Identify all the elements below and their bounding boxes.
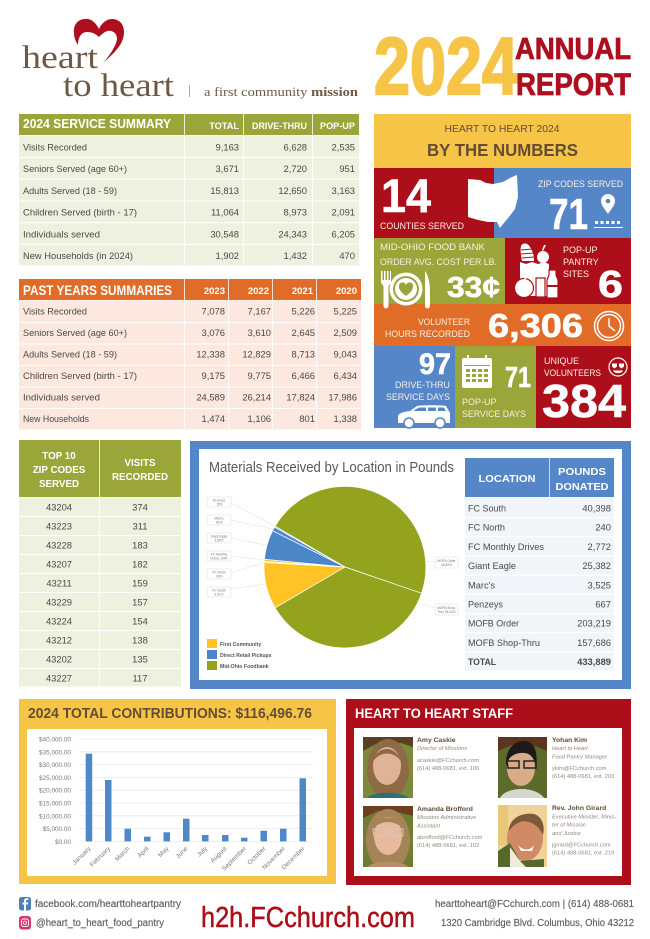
table: 2024 service summary: 1,432 [284,250,307,261]
column heading: zip codes: TOP 10 [42,451,76,462]
icon: facebook [19,897,31,910]
stat: pop-up pantry sites [505,238,631,306]
table: 2024 service summary: 11,064 [211,207,239,218]
table: 2024 service summary: 951 [339,163,355,174]
table: pounds donated: Giant Eagle [468,560,516,571]
table: 2024 service summary: 2,535 [332,142,355,152]
staff: Amy Caskie [417,737,479,772]
table: past years summaries: 5,225 [334,306,357,316]
table: top 10 zip codes: 43202 [46,654,72,664]
bar chart: June [175,845,190,860]
staff: Amy Caskie: acaskie@FCchurch.com [417,758,479,764]
staff: Amy Caskie: (614) 488-0681, ext. 106 [417,766,479,772]
staff: Yohan Kim [552,737,614,780]
staff heading: HEART TO HEART STAFF [355,705,513,721]
table: pounds donated: 433,889 [577,656,611,667]
bar chart: May [157,845,171,859]
table: past years summaries: 7,167 [248,306,271,316]
table: 2024 service summary: 30,548 [210,228,239,239]
staff: Yohan Kim: Food Pantry Manager [552,754,608,760]
stat: zip codes served: ZIP CODES SERVED [538,179,623,189]
table: 2024 service summary: 8,973 [284,207,307,218]
table: top 10 zip codes: 43224 [46,616,72,626]
pie data labels: .06% [215,574,223,578]
staff: Amy Caskie: Amy Caskie [417,737,456,744]
table: top 10 zip codes: 157 [132,596,148,608]
staff: Rev. John Girard: and Justice [552,831,581,837]
table: past years summaries: 26,214 [242,392,271,402]
icon: clock [594,312,624,340]
bar chart: February [89,845,112,869]
table: 2024 service summary: 6,628 [284,142,307,152]
column heading: visits: VISITS [124,458,156,469]
bar chart: $5,000.00 [43,826,71,833]
stat: zip codes served [494,168,631,239]
pie data labels: MOFB Order [437,559,456,563]
table: pounds donated: 2,772 [588,541,611,552]
table: past years summaries: 5,226 [292,306,315,316]
table: past years summaries: 17,986 [328,392,357,402]
table: past years summaries: 7,078 [202,306,225,316]
table: past years summaries: 12,338 [196,348,225,360]
icon: calendar [462,355,492,388]
pie legend [207,639,272,670]
stat: counties served [374,168,494,238]
table: past years summaries: Seniors Served (age 60+) [23,327,127,338]
stat: unique volunteers [536,346,631,428]
table: pounds donated: LOCATION [478,473,536,485]
column heading: visits: RECORDED [112,472,168,483]
table: pounds donated: 40,398 [582,502,611,514]
banner: by the numbers: HEART TO HEART 2024 [444,124,560,135]
photo: Amanda Brofford [363,806,413,867]
contact address: 1320 Cambridge Blvd. Columbus, Ohio 43212 [441,918,634,929]
pie data labels: Thru 36.34% [437,610,456,614]
table: past years summaries: 1,474 [202,413,225,424]
table: top 10 zip codes: 43204 [46,502,72,512]
panel: by the numbers [374,114,631,428]
table: top 10 zip codes: 43228 [46,540,72,550]
table: 2024 service summary: 1,902 [216,250,239,261]
panel: staff [346,699,631,885]
table: pounds donated [465,458,614,670]
table: past years summaries: 3,076 [202,327,225,338]
column heading: zip codes: ZIP CODES [33,465,86,476]
table: top 10 zip codes [19,440,181,687]
table: pounds donated: 3,525 [588,579,611,590]
table: past years summaries [19,279,361,430]
stat: drive-thru days [374,346,455,428]
table: 2024 service summary: POP-UP [320,121,355,131]
staff: Amy Caskie: Director of Missions [417,746,467,752]
photo: Yohan Kim [498,737,547,798]
logo word: heart: heart [22,40,98,76]
staff: Amanda Brofford: abrofford@FCchurch.com [417,835,483,841]
table heading: 2024 SERVICE SUMMARY [23,116,171,131]
table: pounds donated: FC South [468,502,506,514]
chart title: Materials Received by Location in Pounds [209,460,454,476]
stat: pop-up service days: SERVICE DAYS [462,409,526,419]
banner: by the numbers: BY THE NUMBERS [427,140,578,160]
stat: pop-up pantry sites: 6 [598,264,623,306]
bar chart: $40,000.00 [39,736,71,744]
pie chart [264,486,426,648]
bar chart: November [261,845,288,871]
table: past years summaries: Adults Served (18 - 59) [23,348,117,360]
bar chart: July [196,845,209,858]
pie data labels: Marc's [214,516,224,520]
icon: car [398,405,450,428]
stat: counties served: COUNTIES SERVED [380,221,464,231]
table: top 10 zip codes: 183 [132,540,148,550]
table: top 10 zip codes: 374 [132,502,148,512]
table: past years summaries: Individuals served [23,392,100,402]
table: top 10 zip codes: 138 [132,634,148,646]
stat: unique volunteers: UNIQUE [544,356,579,366]
table: top 10 zip codes: 154 [132,616,148,626]
staff: Yohan Kim: (614) 488-0681, ext. 203 [552,774,614,780]
table: past years summaries: 2020 [336,286,357,297]
staff: Amanda Brofford: Amanda Brofford [417,806,473,813]
table: pounds donated: FC Monthly Drives [468,541,544,552]
table: top 10 zip codes: 43211 [46,578,72,588]
table: 2024 service summary: 3,163 [332,185,355,196]
table: 2024 service summary: 15,813 [210,185,239,196]
table: 2024 service summary: Seniors Served (age 60+) [23,163,127,174]
bar chart: December [281,845,307,871]
table: 2024 service summary: Individuals served [23,228,100,239]
table: 2024 service summary: New Households (in 2024) [23,250,133,261]
bar chart: January [71,845,93,867]
pie data labels: 9.31% [214,592,224,596]
table: 2024 service summary: TOTAL [209,121,239,131]
icon: plate fork knife [381,271,430,308]
table: pounds donated: FC North [468,522,505,533]
table: top 10 zip codes: 135 [132,654,148,664]
stat: volunteer hours: VOLUNTEER [418,317,470,327]
stat: pop-up service days: 71 [505,362,531,394]
table: 2024 service summary: 12,650 [278,185,307,196]
table: top 10 zip codes: 43227 [46,672,72,684]
staff: Amanda Brofford [416,806,483,849]
bar chart: April [136,845,150,859]
staff: Yohan Kim: Yohan Kim [552,737,587,744]
stat: pop-up service days [455,346,536,428]
table: top 10 zip codes: 43223 [46,520,72,532]
staff: Rev. John Girard [551,805,616,856]
banner: by the numbers [374,114,631,168]
stat: food bank cost: MID-OHIO FOOD BANK [380,242,485,252]
logo words: to heart: to heart [63,68,174,104]
table: pounds donated: 667 [595,598,611,610]
title word: annual: ANNUAL [515,32,631,66]
pie legend: Mid-Ohio Foodbank [220,664,269,670]
table heading: PAST YEARS SUMMARIES [23,283,172,298]
table: past years summaries: Visits Recorded [23,306,87,316]
bar chart: March [114,845,132,863]
pie data labels: Drives .64% [210,556,228,560]
stat: food bank cost [374,238,505,308]
table: past years summaries: 2021 [292,286,314,297]
staff: Rev. John Girard: Rev. John Girard [552,805,606,812]
table: past years summaries: 3,610 [248,327,271,338]
pie data labels: 46.84% [441,563,452,567]
table: top 10 zip codes: 182 [132,558,148,570]
stat: drive-thru days: SERVICE DAYS [386,392,450,402]
table: past years summaries: 8,713 [292,348,315,360]
table: 2024 service summary: DRIVE-THRU [252,121,307,131]
stat: unique volunteers: VOLUNTEERS [544,368,601,378]
contact email phone: hearttoheart@FCchurch.com | (614) 488-0681 [435,899,634,910]
table: past years summaries: 17,824 [286,392,315,402]
bar chart: $15,000.00 [39,800,71,808]
pie data labels: 5.85% [214,538,224,542]
bar chart [39,736,313,873]
bar chart: September [221,845,249,873]
stat: volunteer hours: HOURS RECORDED [385,329,470,339]
table: 2024 service summary: 6,205 [332,228,355,239]
stat: pop-up pantry sites: SITES [563,269,589,279]
icon: red heart [74,19,124,63]
stat: zip codes served: 71 [549,190,588,239]
table: pounds donated: 157,686 [577,637,611,648]
table: past years summaries: 1,106 [248,413,271,424]
staff: Rev. John Girard: Executive Minister, Minis- [552,814,616,820]
bar chart: $25,000.00 [39,775,71,782]
stat: volunteer hours [374,304,631,346]
bar chart: $10,000.00 [39,813,71,820]
pie data labels: Giant Eagle [211,534,227,538]
title year: 2024 [374,22,518,112]
table: past years summaries: 801 [299,413,315,424]
contributions heading: 2024 TOTAL CONTRIBUTIONS: $116,496.76 [28,706,312,722]
table: past years summaries: 6,434 [334,370,357,381]
facebook handle: facebook.com/hearttoheartpantry [35,899,181,910]
table: pounds donated: TOTAL [468,656,496,667]
icon: instagram [19,916,31,930]
pie data labels: .15% [215,502,223,506]
pie data labels: FC Monthly [211,552,227,556]
table: top 10 zip codes: 43207 [46,558,72,570]
table: pounds donated: 203,219 [577,618,611,629]
bar chart: $0.00 [55,839,71,846]
website: h2h.FCchurch.com [201,902,415,934]
pie leader lines [231,503,435,608]
table: top 10 zip codes: 43212 [46,634,72,646]
staff: Rev. John Girard: jgirard@FCchurch.com [551,842,611,848]
table: 2024 service summary: Adults Served (18 - 59) [23,185,117,196]
staff: Amanda Brofford: (614) 488-0681, ext. 102 [417,843,479,849]
table: past years summaries: 9,775 [248,370,271,381]
tagline: a first community mission [204,84,359,99]
stat: pop-up service days: POP-UP [462,397,497,407]
bar chart: August [209,845,229,864]
stat: pop-up pantry sites: POP-UP [563,245,598,255]
table: past years summaries: 12,829 [242,348,271,360]
stat: drive-thru days: 97 [419,348,451,381]
pie data labels: FC North [213,570,225,574]
table: 2024 service summary: 2,091 [332,207,355,218]
column heading: zip codes: SERVED [39,479,79,490]
stat: drive-thru days: DRIVE-THRU [395,380,450,390]
table: 2024 service summary [19,114,359,266]
table: pounds donated: Marc's [468,579,495,590]
table: past years summaries: 24,589 [196,392,225,402]
table: past years summaries: 2,645 [292,327,315,338]
pie data labels: MOFB Shop- [437,606,456,610]
photo: Amy Caskie [363,737,413,798]
table: top 10 zip codes: 159 [132,578,148,588]
icon: ohio map [468,175,518,228]
table: top 10 zip codes: 311 [133,520,147,532]
icon: grocery bag [514,243,558,298]
pie legend: First Community [220,642,261,648]
panel: total contributions [19,699,336,884]
staff: Amanda Brofford: Assistant [416,824,440,830]
stat: volunteer hours: 6,306 [488,307,583,344]
staff: Yohan Kim: ykim@FCchurch.com [552,766,607,772]
table: pounds donated: MOFB Order [468,618,519,629]
table: past years summaries: 2022 [248,286,269,297]
table: top 10 zip codes: 43229 [46,596,72,608]
panel: materials received [190,441,631,689]
pie legend: Direct Retail Pickups [220,653,272,659]
bar chart: $30,000.00 [39,762,71,769]
icon: heart eyes emoji [609,358,627,376]
logo: heart to heart [22,19,359,104]
title: 2024 annual report [374,22,631,112]
pie data labels: .81% [215,520,223,524]
table: top 10 zip codes: 117 [133,672,147,684]
table: 2024 service summary: 24,343 [278,228,307,239]
table: pounds donated: Penzeys [468,598,503,610]
bar chart: $20,000.00 [39,788,71,795]
stat: counties served: 14 [381,169,431,222]
table: pounds donated: 25,382 [582,560,611,571]
table: past years summaries: New Households [23,413,89,424]
icon: map pin [594,194,623,228]
table: past years summaries: 6,466 [292,370,315,381]
table: pounds donated: DONATED [556,481,609,493]
title word: report: REPORT [516,66,631,102]
staff: Rev. John Girard: (614) 488-0681, ext. 219 [552,850,614,856]
table: 2024 service summary: 3,671 [216,163,239,174]
table: past years summaries: 1,338 [334,413,357,424]
table: 2024 service summary: Children Served (birth - 17) [23,207,137,218]
pie data labels: FC South [212,588,226,592]
table: past years summaries: 9,043 [334,348,357,360]
table: past years summaries: 2023 [204,286,225,297]
bar chart: $35,000.00 [39,749,71,756]
stat: food bank cost: ORDER AVG. COST PER LB. [380,257,497,267]
staff: Amanda Brofford: Missions Administrative [417,815,476,821]
staff: Rev. John Girard: ter of Mission [552,822,586,828]
table: 2024 service summary: 9,163 [216,142,239,152]
photo: Rev. John Girard [498,805,547,867]
table: 2024 service summary: Visits Recorded [23,142,87,152]
table: past years summaries: 9,175 [202,370,225,381]
pie data labels [207,497,458,615]
pie data labels: Penzeys [213,498,225,502]
table: pounds donated: MOFB Shop-Thru [468,637,540,648]
table: past years summaries: 2,509 [334,327,357,338]
table: pounds donated: 240 [595,522,611,533]
bar chart: October [246,845,268,866]
stat: pop-up pantry sites: PANTRY [563,257,599,267]
table: 2024 service summary: 2,720 [284,163,307,174]
table: past years summaries: Children Served (birth - 17) [23,370,137,381]
instagram handle: @heart_to_heart_food_pantry [36,918,164,929]
staff: Yohan Kim: Heart to Heart [552,746,588,752]
table: 2024 service summary: 470 [339,250,355,261]
table: pounds donated: POUNDS [558,466,606,478]
footer [19,897,634,934]
stat: unique volunteers: 384 [542,375,626,427]
stat: food bank cost: 33¢ [447,272,500,304]
